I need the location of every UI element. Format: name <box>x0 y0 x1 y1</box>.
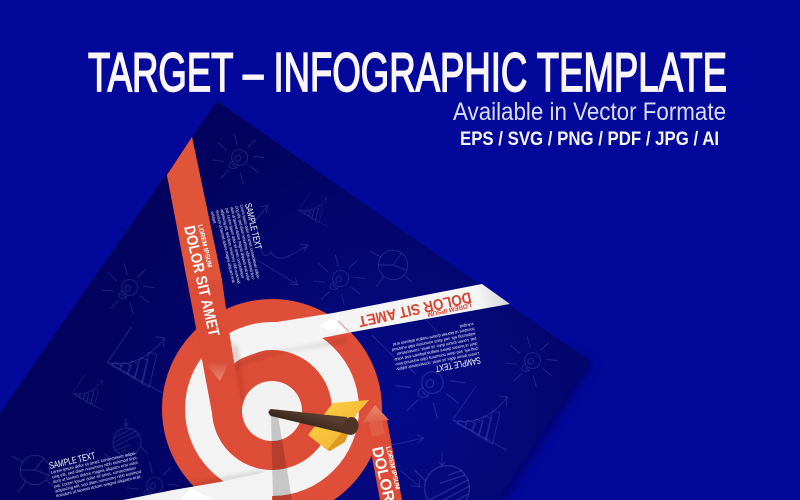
text block: right sample: SAMPLE TEXT <box>434 354 482 374</box>
text block: top sample: cing elit, sed diam nonummy nibh euismod tinci- <box>234 205 256 281</box>
text block: bottom left sample: tincidunt ut laoreet dolore magna aliquam erat <box>56 474 141 498</box>
thin ring edge over ribbon <box>333 317 351 334</box>
shaft shadow <box>271 416 292 500</box>
text block: bottom left sample: adipiscing elit, sed diam nonummy nibh euismod <box>55 469 142 494</box>
text block: bottom left sample: dunt ut laoreet dolore magna aliquam erat volut- <box>52 459 140 484</box>
up arrow <box>362 405 389 423</box>
wooden shaft <box>268 409 351 435</box>
text block: bottom left sample: pat. Lorem ipsum dolor sit amet, consectetuer <box>53 465 137 489</box>
outer red ring <box>162 299 382 500</box>
ribbon: top left red <box>167 137 245 413</box>
text block: top sample: SAMPLE TEXT <box>242 202 263 251</box>
format list: EPS / SVG / PNG / PDF / JPG / AI <box>460 129 719 150</box>
text block: right sample: pat. Lorem ipsum dolor sit amet, consectetuer <box>396 336 477 357</box>
subtitle: Available in Vector Formate <box>453 98 726 126</box>
ribbon text: LOREM IPSUM <box>196 224 213 268</box>
panel: tilted dark sheet <box>0 101 594 500</box>
down arrow <box>206 361 230 381</box>
text block: right sample: adipiscing elit, sed diam nonummy nibh euismod <box>391 331 476 353</box>
arrow in the bullseye <box>268 400 369 451</box>
inner red ring <box>212 350 332 470</box>
ribbon text: LOREM IPSUM <box>384 446 401 490</box>
ribbon text: DOLOR SIT AMET <box>180 224 222 338</box>
text block: top sample: Lorem ipsum dolor sit amet, consectetuer adipis- <box>239 204 261 280</box>
target <box>162 299 382 500</box>
text block: bottom left sample: cing elit, sed diam nonummy nibh euismod tinci- <box>51 455 139 480</box>
text block: bottom left sample: Lorem ipsum dolor sit amet, consectetuer adipis- <box>50 450 138 475</box>
text block: right sample: cing elit, sed diam nonummy nibh euismod tinci- <box>394 346 479 367</box>
text block: right sample: dunt ut laoreet dolore magna aliquam erat volut- <box>393 341 478 363</box>
ribbon: bottom white <box>123 470 272 500</box>
text block: right sample: Lorem ipsum dolor sit amet, consectetuer adipis- <box>395 351 480 372</box>
ribbon text: LOREM IPSUM <box>427 301 472 318</box>
bullseye <box>242 381 302 441</box>
text block: top sample: volutpat. <box>210 211 218 225</box>
ribbon text: DOLOR SIT AMET <box>356 288 473 330</box>
text block: top sample: dunt ut laoreet dolore magna aliquam erat volut- <box>229 206 251 282</box>
doodle icons background <box>12 131 561 500</box>
text block: right sample <box>389 322 482 381</box>
white ring <box>185 322 359 496</box>
ribbon: bottom right red <box>362 405 402 500</box>
text block: top sample: adipiscing elit, sed diam nonummy nibh euismod <box>220 209 242 284</box>
text block: top sample: tincidunt ut laoreet dolore magna aliquam erat <box>215 210 236 284</box>
text block: top sample <box>210 202 270 287</box>
white arrow head <box>180 488 213 500</box>
yellow fletching <box>308 400 369 450</box>
text block: right sample: tincidunt ut laoreet dolore magna aliquam erat <box>392 327 475 347</box>
text block: bottom left sample <box>48 441 143 498</box>
ribbon: top right white <box>222 284 510 370</box>
white arrow head <box>319 314 345 334</box>
text block: top sample: pat. Lorem ipsum dolor sit amet, consectetuer <box>225 208 246 279</box>
text block: bottom left sample: SAMPLE TEXT <box>48 451 97 472</box>
text block: right sample: volutpat. <box>458 322 474 329</box>
